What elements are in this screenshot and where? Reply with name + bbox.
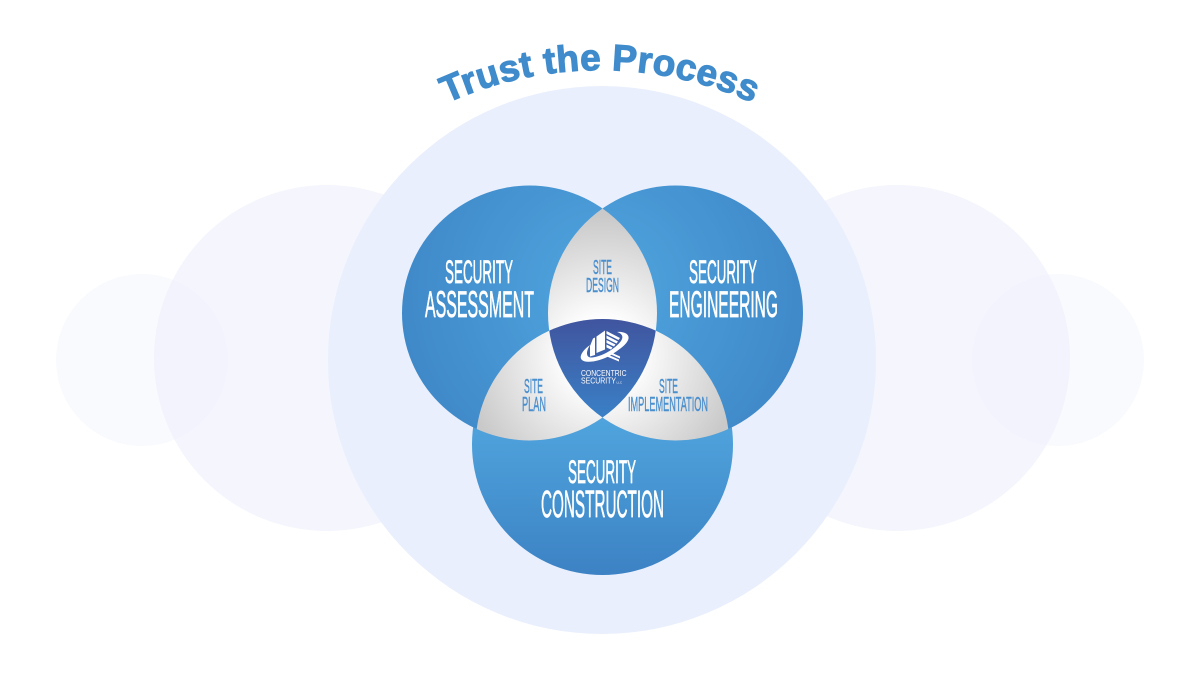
logo text <box>581 369 627 386</box>
overlap: site plan <box>476 330 602 440</box>
venn diagram: ENGINEERING <box>669 283 778 325</box>
overlap: site implementation <box>602 330 728 440</box>
background circle: far left <box>56 274 228 446</box>
label: security construction: SECURITY <box>568 454 636 490</box>
venn diagram: CONSTRUCTION <box>541 484 664 526</box>
background circle: large center <box>328 86 876 634</box>
label: security engineering: SECURITY <box>689 254 757 290</box>
label: security construction <box>541 454 664 526</box>
circle: security assessment <box>402 186 657 440</box>
logo text: LLC <box>616 380 623 384</box>
label: security assessment: SECURITY <box>445 254 513 290</box>
circle: security engineering <box>548 186 803 440</box>
overlap: center shield <box>549 319 656 418</box>
logo text: SECURITY <box>581 376 617 386</box>
background circle: middle right <box>724 185 1070 531</box>
label: site design: SITE <box>593 256 612 279</box>
label: site design <box>586 256 619 297</box>
circle: security construction <box>472 314 733 575</box>
label: site implementation: SITE <box>659 375 678 398</box>
label: security assessment <box>425 254 534 325</box>
background circle: middle left <box>154 185 500 531</box>
venn diagram: IMPLEMENTATION <box>628 393 708 416</box>
label: site implementation <box>628 375 708 416</box>
overlap: site design <box>548 208 657 331</box>
venn diagram <box>400 180 810 575</box>
label: security engineering <box>669 254 778 325</box>
venn diagram: SITE <box>524 375 543 398</box>
logo text: CONCENTRIC <box>581 369 627 378</box>
venn diagram: ASSESSMENT <box>425 283 534 325</box>
venn diagram: DESIGN <box>586 274 619 297</box>
label: site plan <box>522 375 546 416</box>
venn diagram: PLAN <box>522 393 546 416</box>
logo: concentric security <box>581 330 629 386</box>
title: Trust the Process: Trust the Process <box>436 44 758 101</box>
icon: building with swoosh <box>581 330 629 362</box>
background circle: far right <box>972 274 1144 446</box>
